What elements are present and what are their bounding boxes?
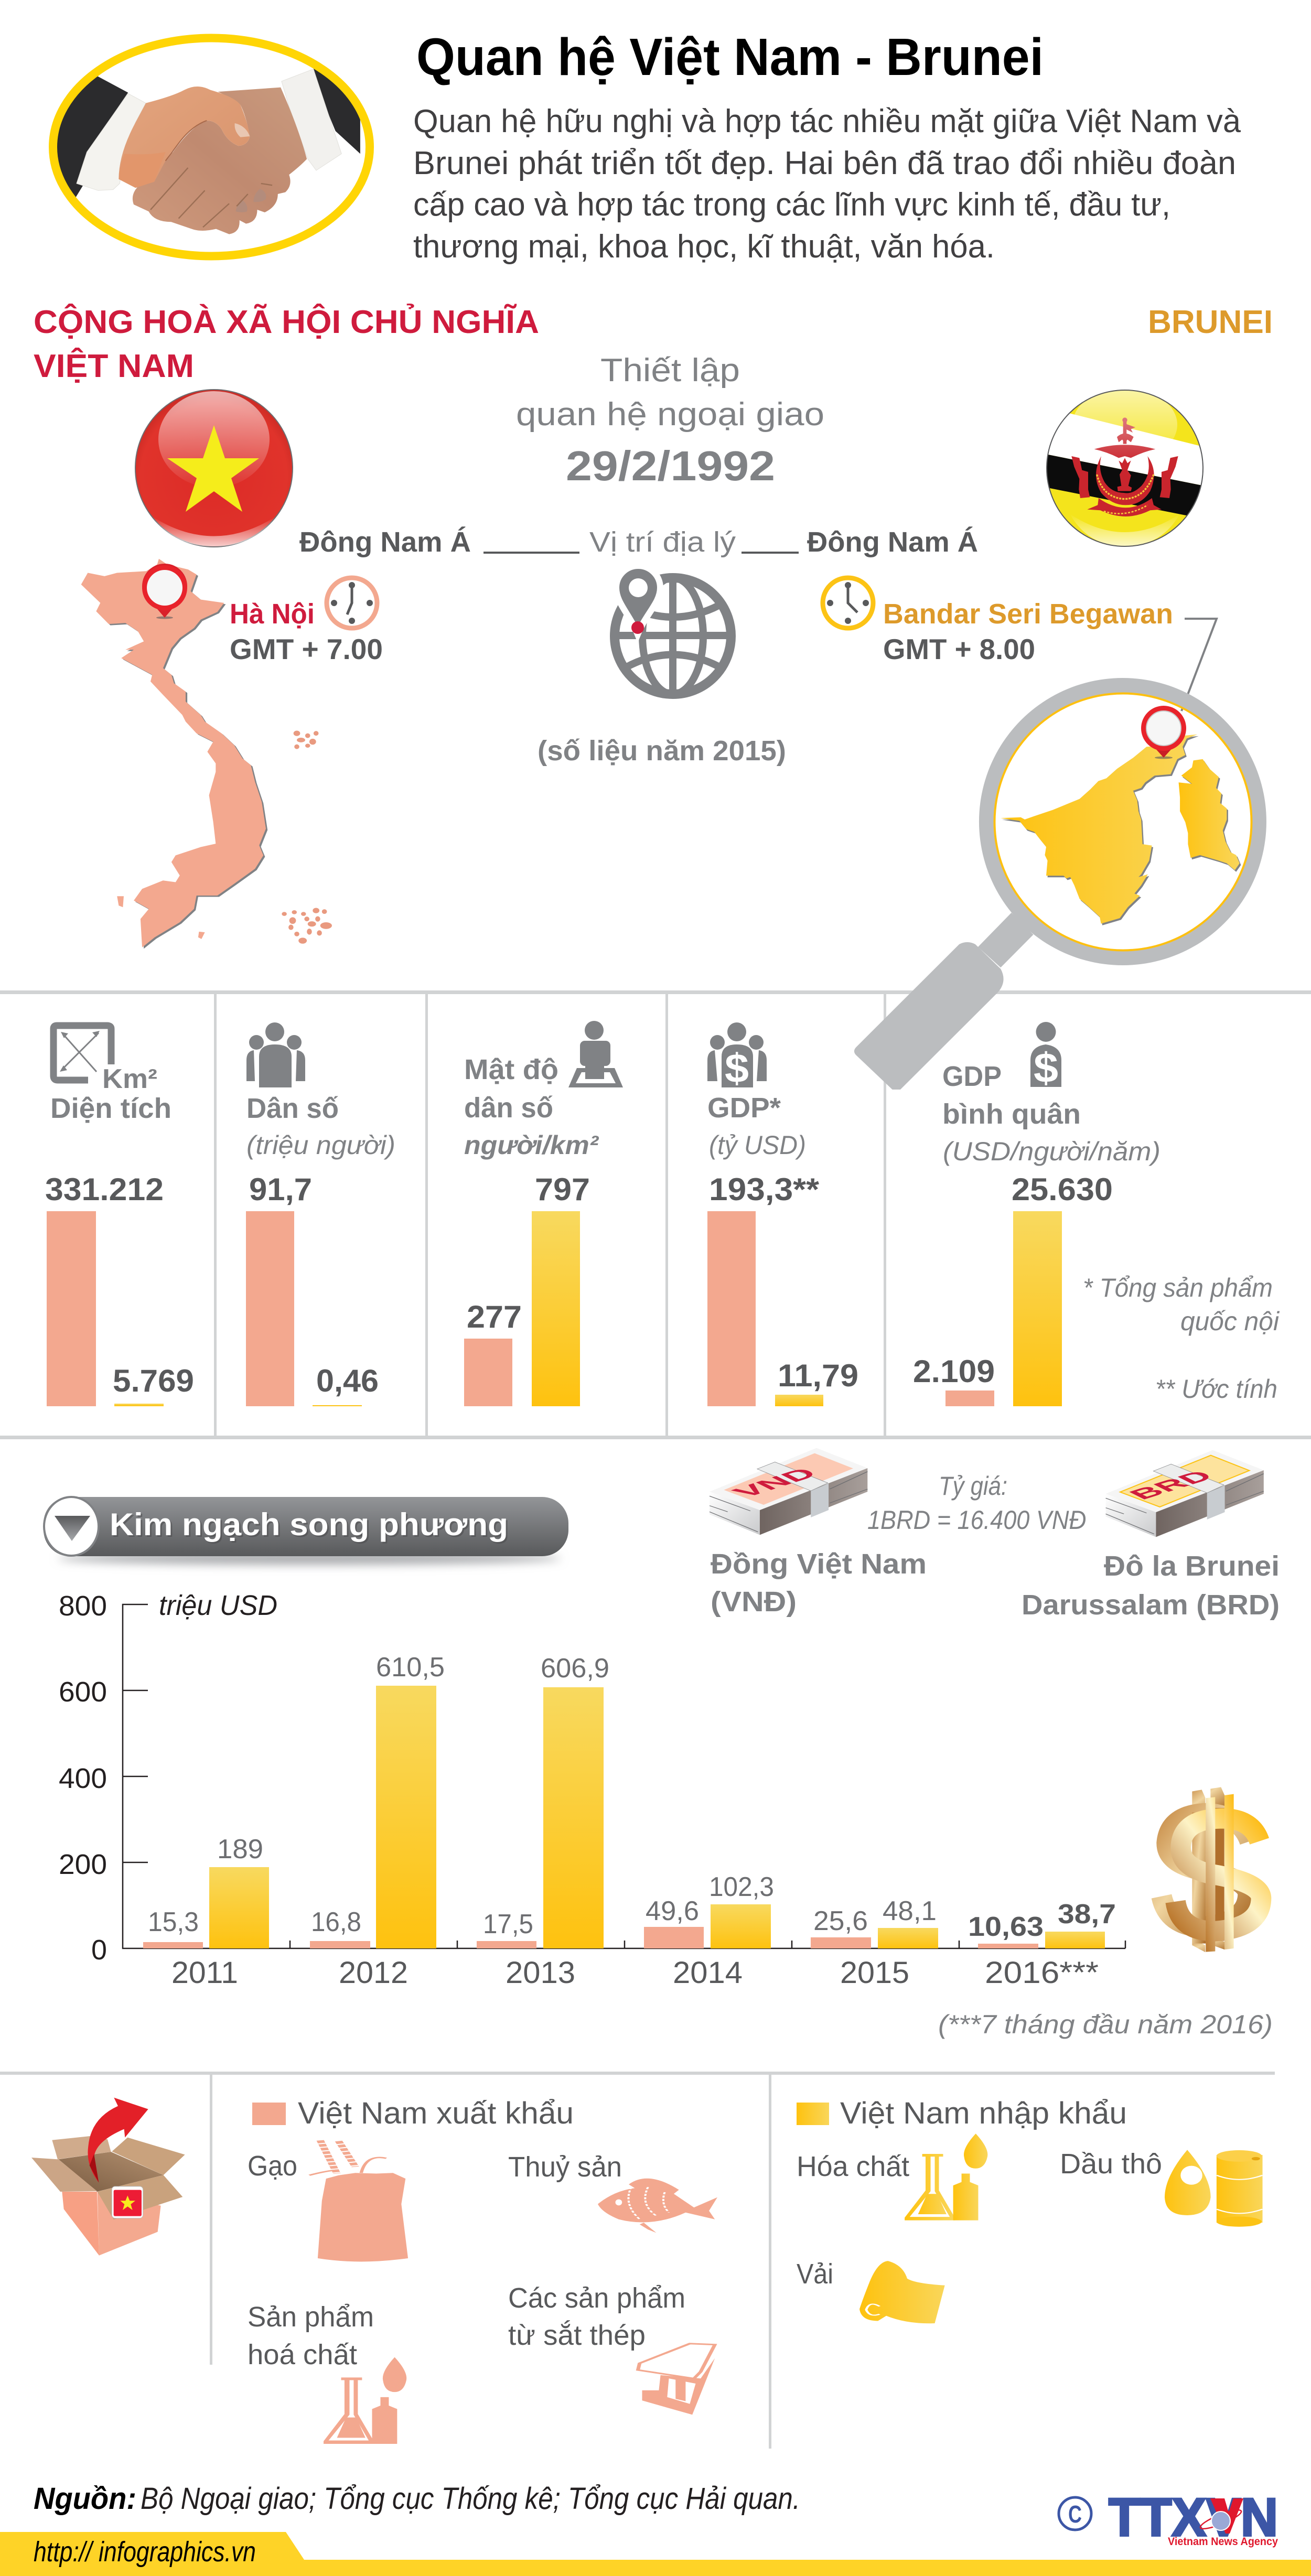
item: chemicals: Sản phẩm — [248, 2301, 374, 2333]
icon: Hanoi clock — [327, 578, 377, 628]
item: crude oil: Dầu thô — [1060, 2148, 1162, 2180]
section heading: bilateral trade — [44, 1497, 568, 1565]
bars: exports — [143, 1927, 1038, 1948]
bar chart: GDP per capita — [913, 1172, 1113, 1406]
y axis: triệu USD — [159, 1590, 277, 1621]
heading: Vietnam country name: CỘNG HOÀ XÃ HỘI CHỦ NGHĨA — [34, 304, 539, 340]
intro paragraph: Brunei phát triển tốt đẹp. Hai bên đã trao đổi nhiều đoàn — [413, 145, 1236, 181]
currency name: BRD: Đô la Brunei — [1104, 1550, 1280, 1582]
value labels: 610,5 — [376, 1652, 445, 1683]
diplomatic relations date — [516, 352, 824, 489]
intro paragraph: thương mại, khoa học, kĩ thuật, văn hóa. — [413, 229, 995, 265]
icon: globe with pin — [614, 566, 732, 695]
stats divider lines — [0, 990, 1311, 1439]
diplomatic relations date: Thiết lập — [600, 352, 740, 389]
source line: Bộ Ngoại giao; Tổng cục Thống kê; Tổng cục Hải quan. — [141, 2482, 800, 2516]
value labels: 10,63 — [968, 1912, 1044, 1942]
panel: imports — [797, 2096, 1263, 2323]
value labels: 48,1 — [883, 1896, 937, 1926]
panel: GDP: GDP* — [707, 1092, 781, 1124]
footnotes: GDP: quốc nội — [1180, 1307, 1280, 1336]
icon: person on land — [568, 1021, 623, 1087]
item: chemicals: hoá chất — [248, 2339, 357, 2370]
bar chart: population: 0,46 — [316, 1363, 379, 1398]
item: rice: Gạo — [248, 2150, 297, 2182]
magnifier lens and handle — [854, 678, 1266, 1090]
bar chart: GDP — [707, 1172, 858, 1406]
Hanoi label — [230, 598, 383, 665]
exchange rate: Tỷ giá: — [939, 1471, 1007, 1501]
icon: area: Km² — [102, 1064, 157, 1094]
icon: people with dollar — [707, 1022, 767, 1091]
value labels: 25,6 — [813, 1906, 868, 1936]
currency name: VND: Đồng Việt Nam — [711, 1548, 927, 1580]
bars: imports — [209, 1686, 1105, 1948]
panel: density: người/km² — [464, 1130, 599, 1160]
Bandar Seri Begawan label: Bandar Seri Begawan — [883, 598, 1173, 630]
intro paragraph: cấp cao và hợp tác trong các lĩnh vực kinh tế, đầu tư, — [413, 187, 1170, 223]
panel: area: Diện tích — [50, 1093, 171, 1124]
geographic location row: Vị trí địa lý — [589, 526, 736, 558]
bar chart: GDP per capita: 2.109 — [913, 1354, 995, 1389]
icon: person with dollar — [1030, 1022, 1061, 1091]
panel: population — [246, 1022, 395, 1406]
panel: GDP per capita: bình quân — [942, 1098, 1081, 1130]
panel: GDP per capita: (USD/người/năm) — [943, 1137, 1160, 1166]
item: rice — [248, 2140, 408, 2261]
bar chart: trade turnover — [59, 1590, 1125, 1990]
bar chart: density: 797 — [535, 1172, 590, 1207]
y axis — [59, 1590, 1125, 1966]
bar chart: population: 91,7 — [249, 1172, 312, 1207]
icon: export box — [31, 2098, 185, 2256]
icon: handshake in gold ellipse — [42, 38, 370, 256]
icon: area — [53, 1026, 157, 1094]
icon: BRD note stack: BRD — [1123, 1468, 1220, 1503]
item: steel products — [508, 2282, 715, 2415]
value labels: 189 — [217, 1834, 263, 1864]
logo: TTXVN: TTXVN — [1109, 2487, 1278, 2547]
currency name: VND — [711, 1548, 927, 1618]
legend: exports: Việt Nam xuất khẩu — [298, 2096, 574, 2130]
section heading: bilateral trade: Kim ngạch song phương — [110, 1507, 508, 1542]
year labels — [171, 1956, 1099, 1990]
year labels: 2015 — [840, 1956, 909, 1990]
panel: density: Mật độ — [464, 1054, 558, 1085]
item: chemicals import: Hóa chất — [797, 2151, 909, 2182]
y axis: 800 — [59, 1590, 107, 1622]
bar chart: GDP: 193,3** — [709, 1172, 820, 1207]
value labels: 16,8 — [311, 1907, 361, 1937]
map: Brunei — [1001, 735, 1241, 925]
y axis: 200 — [59, 1849, 107, 1880]
panel: GDP — [707, 1022, 858, 1406]
bar chart: density: 277 — [467, 1299, 522, 1334]
y axis: 0 — [91, 1934, 107, 1966]
item: chemicals — [248, 2301, 406, 2444]
item: chemicals import — [797, 2133, 987, 2221]
bar chart: density — [464, 1172, 590, 1406]
icon: VND note stack — [710, 1448, 867, 1535]
geographic location row — [299, 526, 978, 558]
heading: Brunei: BRUNEI — [1148, 304, 1273, 340]
panel: GDP per capita — [913, 1022, 1160, 1406]
logo: TTXVN: C — [1068, 2500, 1082, 2528]
diplomatic relations date: 29/2/1992 — [566, 443, 775, 489]
icon: people with dollar: $ — [725, 1045, 749, 1091]
icon: Bandar Seri Begawan pin — [1141, 706, 1186, 759]
item: seafood — [508, 2151, 717, 2233]
bar chart: population — [246, 1172, 379, 1406]
bar chart: area: 5.769 — [113, 1363, 194, 1398]
footnotes: GDP: ** Ước tính — [1155, 1374, 1277, 1404]
intro paragraph: Quan hệ hữu nghị và hợp tác nhiều mặt giữa Việt Nam và — [413, 103, 1241, 139]
icon: Brunei flag — [1046, 390, 1203, 547]
trade section divider lines — [0, 2072, 1275, 2449]
item: fabric: Vải — [797, 2258, 833, 2290]
value labels: 102,3 — [709, 1872, 774, 1902]
icon: BRD note stack — [1106, 1450, 1264, 1537]
y axis: 600 — [59, 1676, 107, 1708]
year labels: 2012 — [339, 1956, 408, 1990]
year labels: 2016*** — [985, 1956, 1099, 1990]
title: Quan hệ Việt Nam - Brunei — [416, 28, 1044, 87]
bar chart: GDP: 11,79 — [778, 1358, 858, 1393]
Bandar Seri Begawan label — [883, 598, 1173, 665]
value labels: 38,7 — [1058, 1899, 1116, 1930]
heading: Vietnam country name — [34, 304, 539, 384]
item: fabric — [797, 2258, 945, 2323]
currency name: BRD — [1022, 1550, 1280, 1621]
icon: Brunei clock — [823, 578, 873, 628]
heading: Vietnam country name: VIỆT NAM — [34, 348, 194, 384]
currency name: BRD: Darussalam (BRD) — [1022, 1589, 1280, 1621]
footnote: 2016: (***7 tháng đầu năm 2016) — [938, 2010, 1273, 2039]
footnotes: GDP: * Tổng sản phẩm — [1083, 1273, 1273, 1302]
Bandar Seri Begawan label: GMT + 8.00 — [883, 633, 1035, 665]
value labels: 15,3 — [148, 1907, 199, 1937]
intro paragraph — [413, 103, 1241, 265]
value labels: 606,9 — [541, 1653, 609, 1684]
icon: Hanoi pin — [142, 564, 187, 619]
value labels — [148, 1652, 1116, 1942]
exchange rate — [867, 1471, 1086, 1535]
icon: person with dollar: $ — [1034, 1044, 1058, 1091]
y axis: 400 — [59, 1763, 107, 1794]
icon: Vietnam flag — [135, 390, 293, 547]
leader line — [1181, 619, 1217, 711]
year labels: 2014 — [673, 1956, 743, 1990]
bar chart: area — [45, 1172, 194, 1406]
panel: density — [464, 1021, 623, 1406]
map: Vietnam — [81, 559, 332, 949]
year labels: 2011 — [171, 1956, 238, 1990]
logo: TTXVN: Vietnam News Agency — [1168, 2536, 1278, 2548]
icon: VND note stack: VND — [726, 1465, 824, 1501]
exchange rate: 1BRD = 16.400 VNĐ — [867, 1505, 1086, 1535]
panel: population: Dân số — [246, 1093, 339, 1124]
Hanoi label: GMT + 7.00 — [230, 633, 383, 665]
panel: area — [45, 1026, 194, 1406]
bar chart: area: 331.212 — [45, 1172, 164, 1207]
currency name: VND: (VNĐ) — [711, 1586, 797, 1618]
panel: exports — [248, 2096, 717, 2444]
footer band — [0, 2532, 1311, 2576]
source line: Nguồn: — [34, 2482, 136, 2516]
data year note: (số liệu năm 2015) — [538, 735, 786, 767]
icon: gold dollar sign — [1162, 1787, 1261, 1952]
footer band: http:// infographics.vn — [34, 2536, 256, 2568]
panel: population: (triệu người) — [246, 1130, 395, 1160]
geographic location row: Đông Nam Á — [807, 526, 978, 558]
item: steel products: Các sản phẩm — [508, 2282, 685, 2314]
item: seafood: Thuỷ sản — [508, 2151, 622, 2183]
geographic location row: Đông Nam Á — [299, 526, 471, 558]
Hanoi label: Hà Nội — [230, 598, 315, 630]
value labels: 49,6 — [646, 1896, 699, 1926]
item: steel products: từ sắt thép — [508, 2320, 646, 2351]
magnifier with Brunei map — [854, 619, 1266, 1090]
legend: imports: Việt Nam nhập khẩu — [840, 2096, 1127, 2130]
footnotes: GDP — [1083, 1273, 1280, 1404]
bar chart: GDP per capita: 25.630 — [1012, 1172, 1113, 1207]
diplomatic relations date: quan hệ ngoại giao — [516, 396, 824, 433]
panel: density: dân số — [464, 1092, 553, 1124]
year labels: 2013 — [506, 1956, 575, 1990]
panel: GDP: (tỷ USD) — [709, 1130, 806, 1160]
item: crude oil — [1060, 2148, 1263, 2227]
icon: people — [246, 1022, 305, 1087]
value labels: 17,5 — [483, 1909, 533, 1939]
panel: GDP per capita: GDP — [942, 1061, 1002, 1092]
section heading: bilateral trade: Kim ngạch song phương — [111, 1508, 510, 1544]
